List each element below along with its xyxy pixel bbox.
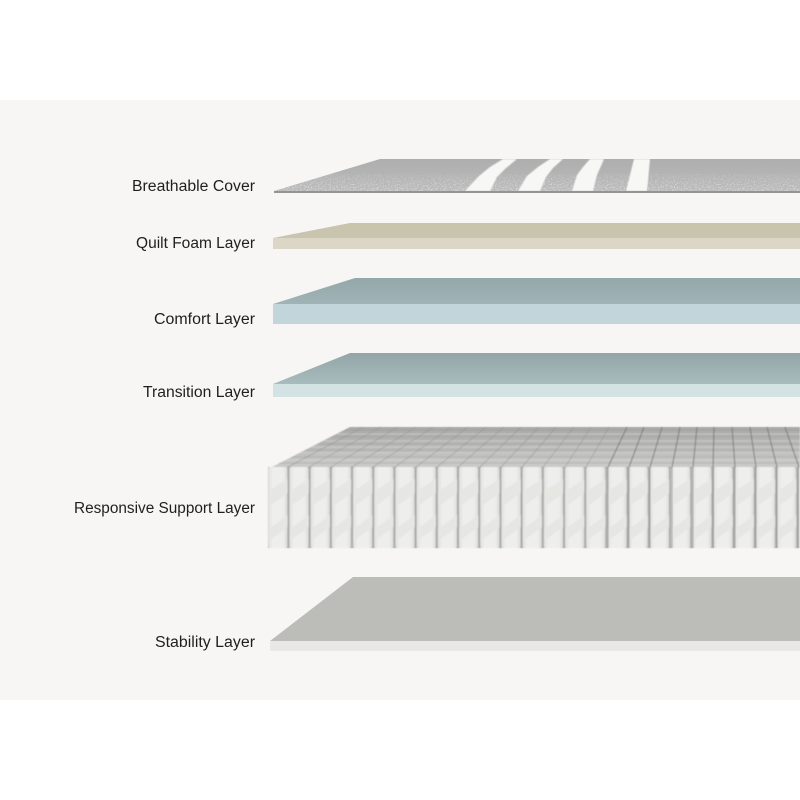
layer: comfort (273, 278, 800, 324)
layer: breathable cover (274, 159, 800, 193)
layer: transition (273, 353, 800, 397)
spring coils front (268, 467, 800, 548)
layer: stability (270, 577, 800, 651)
background panel (0, 100, 800, 700)
label: Stability Layer: Stability Layer (155, 634, 255, 651)
label: Transition Layer: Transition Layer (143, 384, 255, 401)
layer: responsive support springs (268, 427, 800, 548)
label: Responsive Support Layer: Responsive Support Layer (74, 500, 255, 517)
white stripes (465, 159, 650, 191)
layer: quilt foam (273, 223, 800, 249)
label: Comfort Layer: Comfort Layer (154, 311, 255, 328)
label: Breathable Cover: Breathable Cover (132, 178, 255, 195)
label: Quilt Foam Layer: Quilt Foam Layer (136, 235, 255, 252)
darker coil gaps on the right (608, 467, 798, 548)
spring tops (272, 427, 800, 467)
